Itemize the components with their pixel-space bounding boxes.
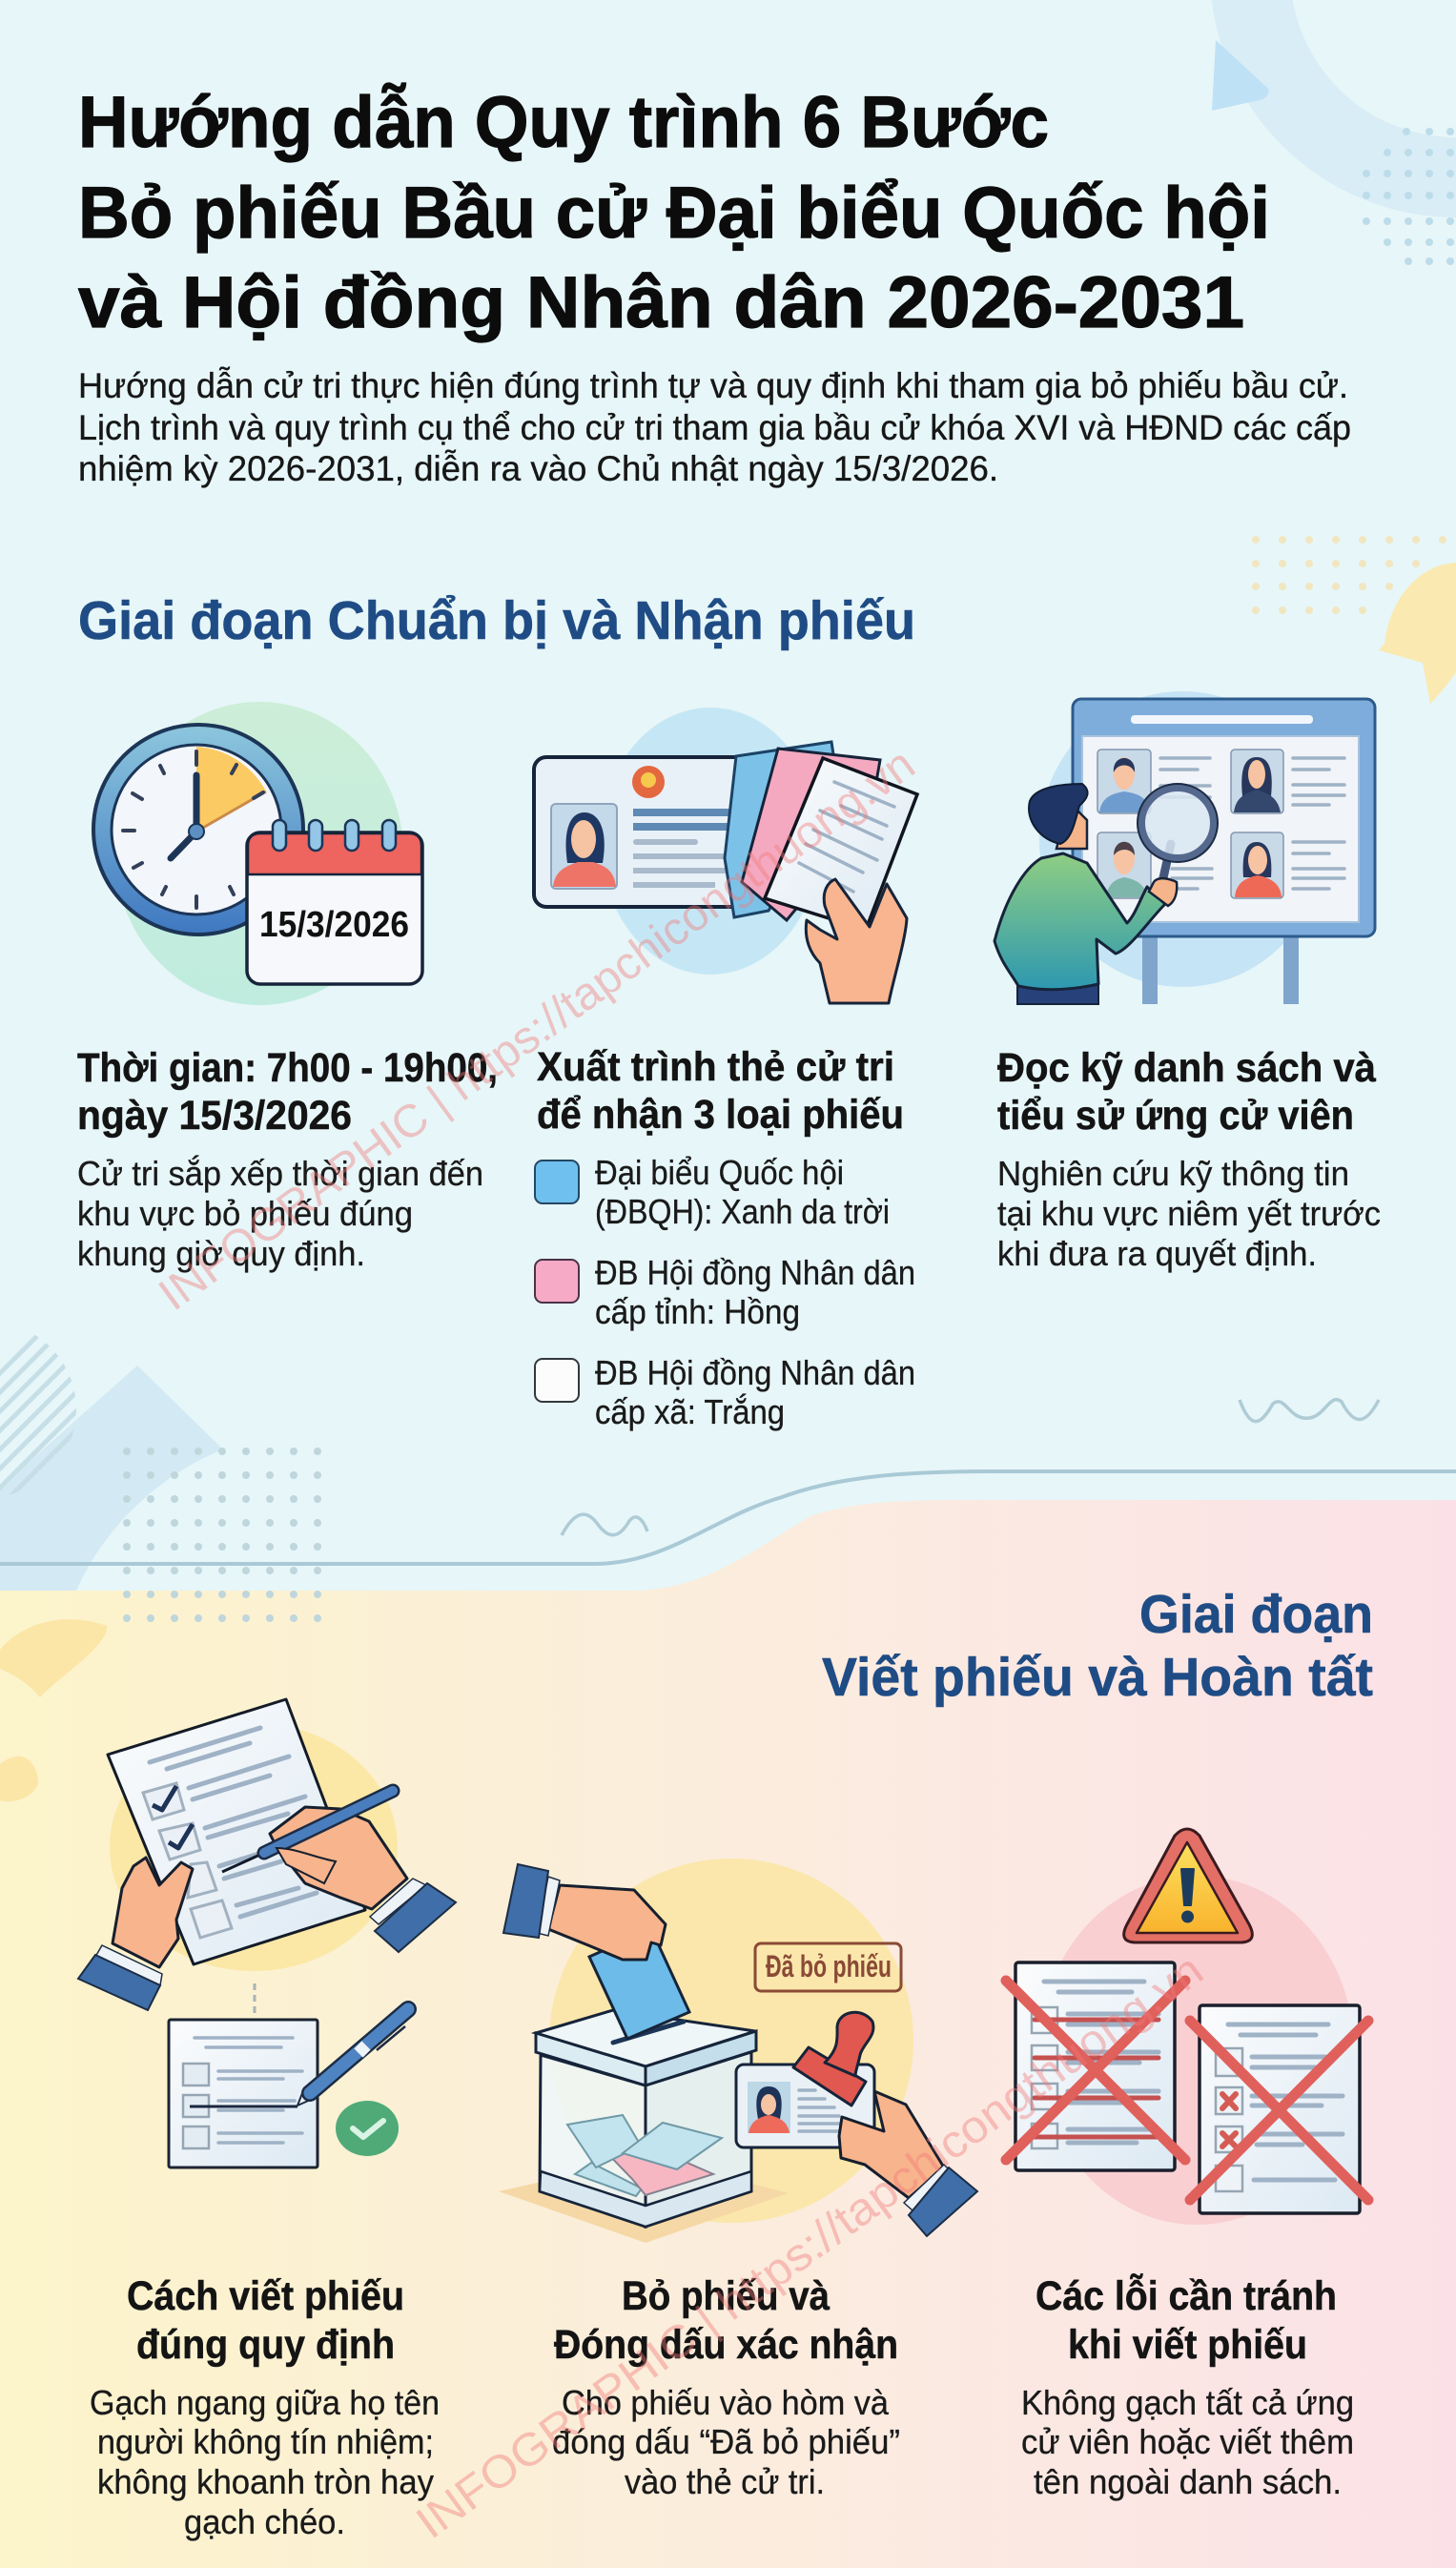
- decoration: squiggle middle: [562, 1514, 647, 1535]
- step 1 heading and text: [77, 1045, 498, 1273]
- candidate portrait 4: [1231, 832, 1283, 898]
- intro text: Hướng dẫn cử tri thực hiện đúng trình tự và quy định khi tham gia bỏ phiếu bầu cử.: [78, 366, 1348, 405]
- step 6 heading and text: khi viết phiếu: [1068, 2322, 1307, 2368]
- step 3 heading and text: tiểu sử ứng cử viên: [997, 1093, 1354, 1139]
- step 5 heading and text: đóng dấu “Đã bỏ phiếu”: [552, 2422, 900, 2461]
- step 6 heading and text: Không gạch tất cả ứng: [1021, 2383, 1354, 2422]
- decoration: yellow dots right: [1252, 536, 1446, 614]
- step 5 heading and text: Bỏ phiếu và: [622, 2273, 831, 2319]
- heading: writing stage: Giai đoạn: [1139, 1584, 1373, 1645]
- invalid ballot 1: [1015, 1962, 1175, 2170]
- step 5 heading and text: [552, 2273, 900, 2501]
- decoration: left dot grid: [123, 1448, 321, 1622]
- invalid ballot 2: [1200, 2005, 1360, 2213]
- heading: preparation stage: Giai đoạn Chuẩn bị và Nhận phiếu: [78, 590, 915, 651]
- step 1 heading and text: Cử tri sắp xếp thời gian đến: [77, 1154, 483, 1193]
- step 1 heading and text: Thời gian: 7h00 - 19h00,: [77, 1045, 498, 1091]
- watermark 2: INFOGRAPHIC | https://tapchicongthuong.vn: [407, 1944, 1213, 2549]
- decoration: left stripes: [0, 1335, 76, 1495]
- step 6 heading and text: cử viên hoặc viết thêm: [1021, 2422, 1354, 2461]
- icon: voter card and three ballots: [534, 708, 917, 1003]
- step 4 heading and text: gạch chéo.: [184, 2502, 345, 2541]
- candidate portrait 2: [1231, 750, 1283, 813]
- step 5 heading and text: Cho phiếu vào hòm và: [562, 2383, 890, 2422]
- decoration: squiggle right: [1240, 1400, 1379, 1422]
- decoration: top right dots: [1363, 128, 1454, 265]
- step 3 heading and text: [997, 1045, 1381, 1273]
- heading: writing stage: Viết phiếu và Hoàn tất: [822, 1647, 1373, 1708]
- step 4 heading and text: [90, 2273, 440, 2541]
- ballot legend: blue: Đại biểu Quốc hội: [595, 1153, 844, 1192]
- step 4 heading and text: đúng quy định: [136, 2322, 395, 2368]
- intro text: [78, 366, 1351, 488]
- step 2 heading: Xuất trình thẻ cử tri: [537, 1044, 894, 1090]
- step 5 heading and text: Đóng dấu xác nhận: [554, 2322, 898, 2368]
- icon: clock and calendar: [93, 702, 422, 1005]
- step 1 heading and text: khu vực bỏ phiếu đúng: [77, 1194, 413, 1233]
- watermark 1: INFOGRAPHIC | https://tapchicongthuong.vn: [150, 739, 924, 1321]
- step 3 heading and text: tại khu vực niêm yết trước: [997, 1194, 1381, 1233]
- decoration: left triangle shape: [0, 1366, 223, 1591]
- ballot legend: pink: [535, 1253, 915, 1331]
- background: lower pastel area: [0, 1500, 1456, 2568]
- step 1 heading and text: khung giờ quy định.: [77, 1234, 365, 1273]
- icon: hands marking a ballot: [78, 1699, 456, 2167]
- ballot legend: blue: (ĐBQH): Xanh da trời: [595, 1192, 890, 1231]
- title: và Hội đồng Nhân dân 2026-2031: [78, 262, 1244, 343]
- heading: writing stage: [822, 1584, 1373, 1708]
- icon: ballot box and stamp: Đã bỏ phiếu: [766, 1949, 892, 1983]
- ballot legend: pink: cấp tỉnh: Hồng: [595, 1292, 800, 1331]
- step 3 heading and text: khi đưa ra quyết định.: [997, 1234, 1317, 1273]
- step 2 heading: để nhận 3 loại phiếu: [537, 1092, 904, 1138]
- step 3 heading and text: Đọc kỹ danh sách và: [997, 1045, 1377, 1091]
- title: [78, 82, 1270, 343]
- red cross marks: [1006, 1981, 1368, 2200]
- step 6 heading and text: Các lỗi cần tránh: [1036, 2272, 1337, 2319]
- icon: clock and calendar: 15/3/2026: [259, 905, 409, 945]
- step 4 heading and text: Gạch ngang giữa họ tên: [90, 2383, 440, 2422]
- candidate portrait 3: [1097, 832, 1151, 898]
- candidate portrait 1: [1097, 750, 1151, 813]
- decoration: top right arc: [1212, 0, 1456, 177]
- decoration: yellow blob right: [1379, 563, 1456, 704]
- icon: invalid ballots and warning sign: [1006, 1829, 1368, 2225]
- step 6 heading and text: [1021, 2272, 1354, 2501]
- step 1 heading and text: ngày 15/3/2026: [77, 1093, 352, 1139]
- icon: man reading candidate board: [995, 691, 1375, 1004]
- intro text: nhiệm kỳ 2026-2031, diễn ra vào Chủ nhật ngày 15/3/2026.: [78, 449, 998, 488]
- step 4 heading and text: không khoanh tròn hay: [97, 2462, 434, 2501]
- step 4 heading and text: người không tín nhiệm;: [97, 2422, 434, 2461]
- decoration: yellow blob left: [0, 1619, 107, 1801]
- ballot legend: white: cấp xã: Trắng: [595, 1392, 785, 1431]
- step 2 heading: [537, 1044, 904, 1138]
- ballot legend: white: ĐB Hội đồng Nhân dân: [595, 1353, 915, 1392]
- title: Hướng dẫn Quy trình 6 Bước: [78, 82, 1049, 163]
- title: Bỏ phiếu Bầu cử Đại biểu Quốc hội: [78, 173, 1270, 254]
- divider: curved line: [0, 1471, 1456, 1564]
- ballot legend: blue: [535, 1153, 890, 1231]
- step 6 heading and text: tên ngoài danh sách.: [1034, 2462, 1342, 2501]
- icon: ballot box and stamp: [499, 1859, 977, 2243]
- step 5 heading and text: vào thẻ cử tri.: [625, 2462, 825, 2501]
- ballot legend: white: [535, 1353, 915, 1431]
- intro text: Lịch trình và quy trình cụ thể cho cử tri tham gia bầu cử khóa XVI và HĐND các cấp: [78, 408, 1351, 447]
- step 3 heading and text: Nghiên cứu kỹ thông tin: [997, 1154, 1349, 1193]
- icon: warning triangle: [1124, 1829, 1252, 1942]
- ballot legend: pink: ĐB Hội đồng Nhân dân: [595, 1253, 915, 1292]
- step 4 heading and text: Cách viết phiếu: [127, 2273, 404, 2319]
